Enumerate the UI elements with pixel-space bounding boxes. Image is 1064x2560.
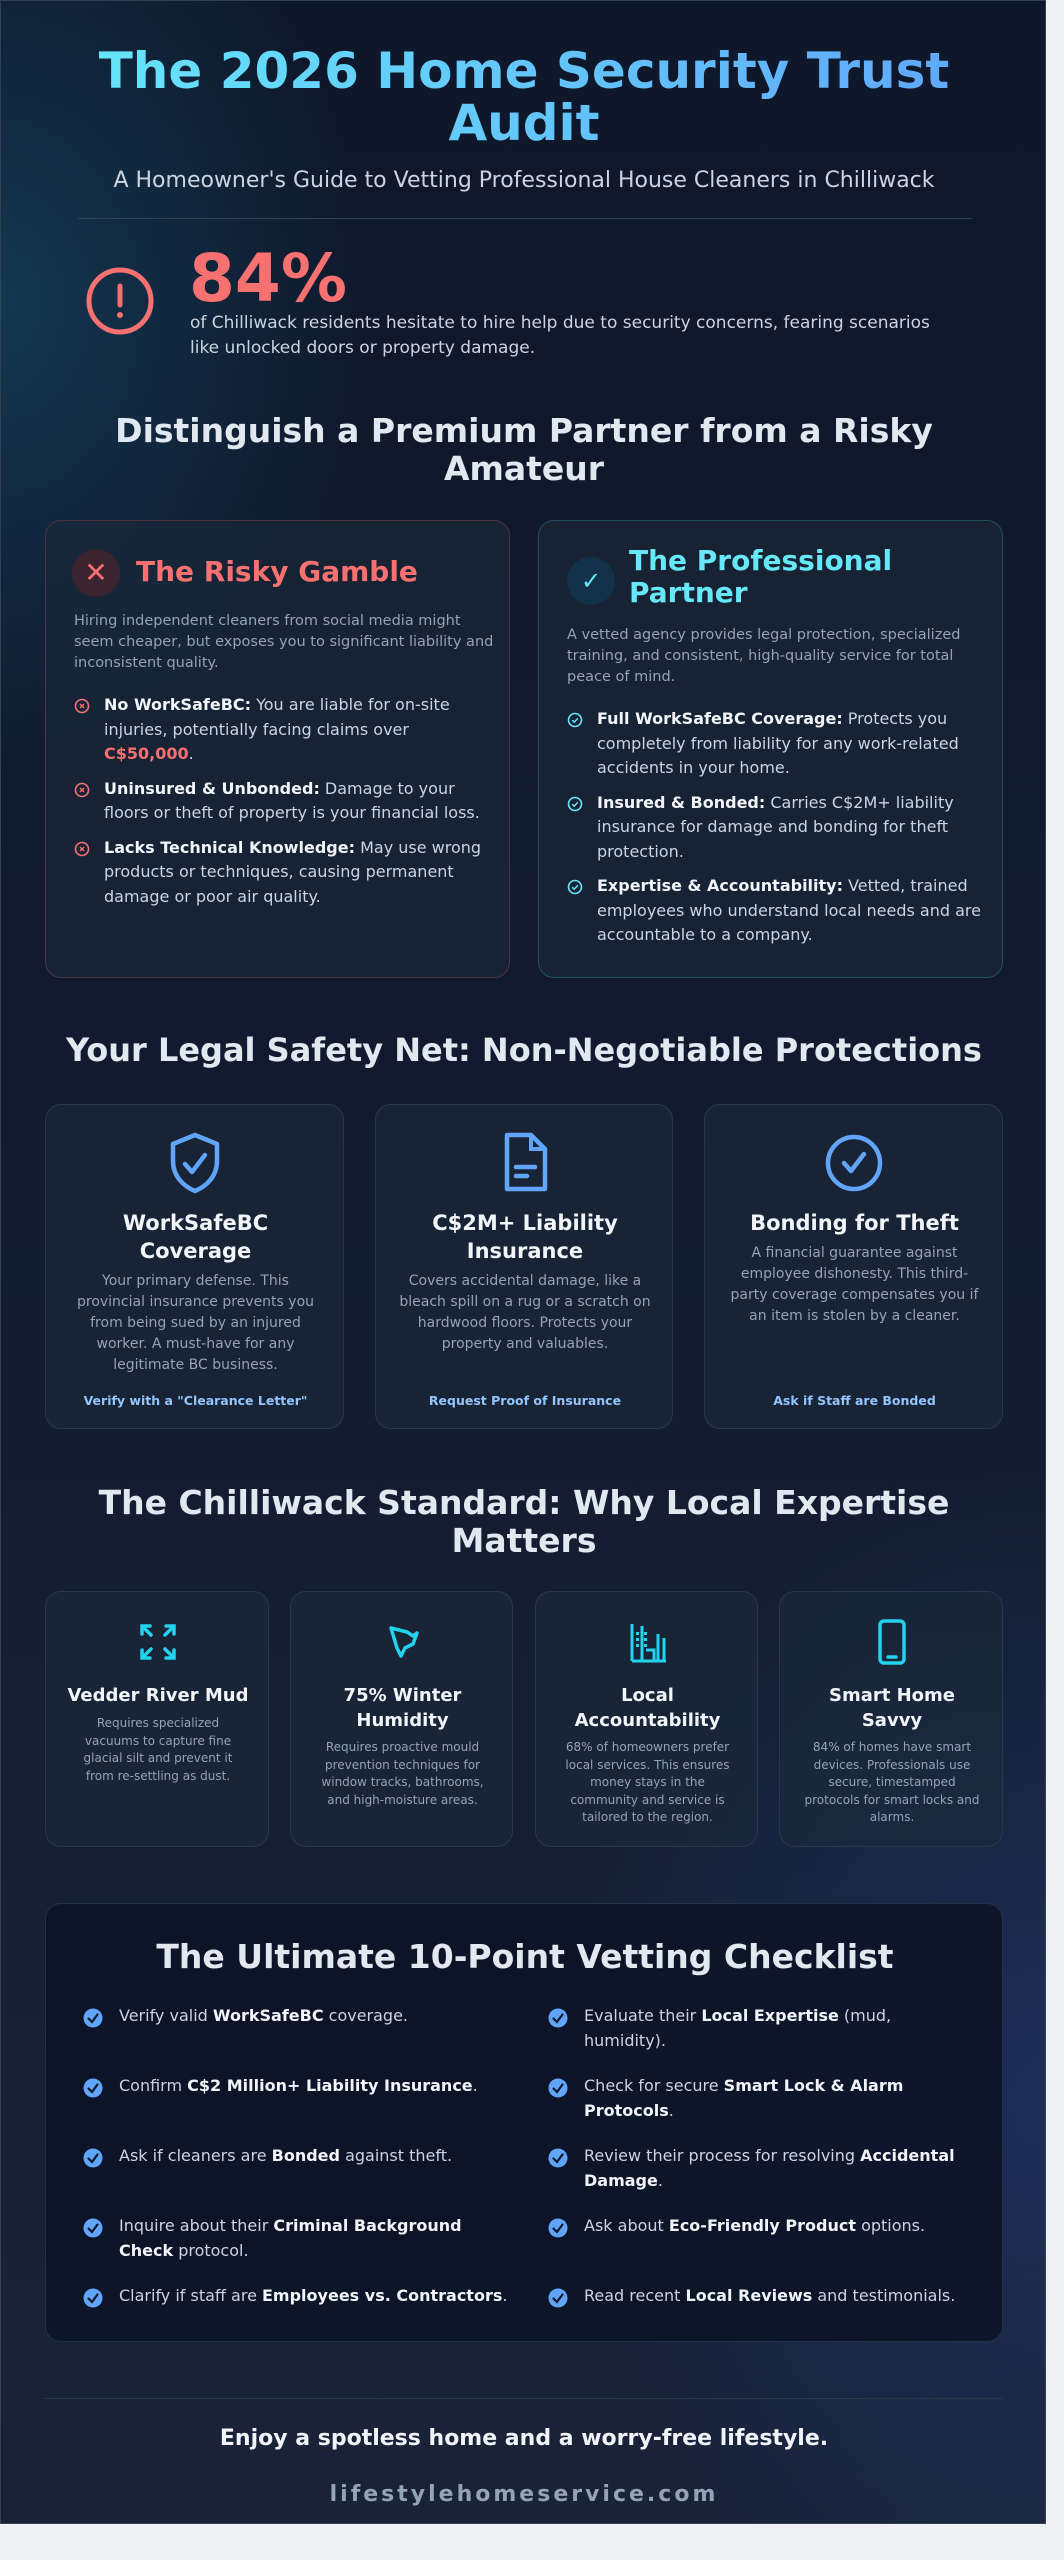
card: workSafeBC	[45, 1104, 344, 1429]
card title: Partner	[629, 576, 748, 609]
footer url: lifestylehomeservice.com	[330, 2482, 718, 2507]
heading: comparison: Distinguish a Premium Partner from a Risky Amateur	[115, 411, 933, 488]
checklist items: Clarify if staff are Employees vs. Contractors.	[119, 2286, 507, 2305]
card: accountability: 68% of homeowners prefer local services. This ensures money stays in the community and service is tailored to the region.	[565, 1740, 730, 1824]
card intro: A vetted agency provides legal protection, specialized training, and consistent, high-quality service for total peace of mind.	[567, 627, 960, 685]
card title: The Professional	[629, 544, 892, 577]
card: humidity: Requires proactive mould prevention techniques for window tracks, bathrooms, and high-moisture areas.	[321, 1740, 484, 1806]
icon: leaf	[389, 1626, 419, 1658]
panel: professional partner	[538, 520, 1003, 978]
card: liability: C$2M+ Liability Insurance	[432, 1211, 618, 1263]
checklist items: Evaluate their Local Expertise (mud, humidity).	[584, 2006, 891, 2050]
panel: checklist	[45, 1903, 1003, 2342]
subtitle: A Homeowner's Guide to Vetting Professional House Cleaners in Chilliwack	[113, 168, 935, 193]
icon: x	[72, 549, 120, 597]
checklist items: Read recent Local Reviews and testimonials.	[584, 2286, 955, 2305]
icon: alert	[86, 268, 154, 334]
card: bonding: Ask if Staff are Bonded	[773, 1393, 936, 1408]
card: smart home: Smart Home Savvy	[829, 1685, 955, 1731]
heading: local expertise: The Chilliwack Standard: Why Local Expertise Matters	[99, 1483, 949, 1560]
card: accountability: Local Accountability	[575, 1685, 720, 1731]
icon: expand arrows	[140, 1624, 176, 1660]
list: risks: No WorkSafeBC: You are liable for on-site injuries, potentially facing claims over C$50,000.	[104, 695, 450, 763]
card: liability: Request Proof of Insurance	[429, 1393, 621, 1408]
list: benefits: Expertise & Accountability: Vetted, trained employees who understand local needs and are accountable to a company.	[597, 876, 981, 944]
card: accountability	[535, 1591, 758, 1847]
icon: check circle	[826, 1134, 882, 1192]
checklist items: Ask about Eco-Friendly Product options.	[584, 2216, 925, 2235]
card: liability: Covers accidental damage, like a bleach spill on a rug or a scratch on hardwood floors. Protects your property and valuables.	[399, 1273, 651, 1352]
checklist items: Review their process for resolving Accidental Damage.	[584, 2146, 955, 2190]
icon: shield	[170, 1132, 220, 1194]
card: smart home: 84% of homes have smart devices. Professionals use secure, timestamped protocols for smart locks and alarms.	[805, 1740, 979, 1824]
card: smart home	[779, 1591, 1003, 1847]
checklist items: Inquire about their Criminal Background Check protocol.	[119, 2216, 462, 2260]
list: risks: Lacks Technical Knowledge: May use wrong products or techniques, causing permanent damage or poor air quality.	[104, 838, 481, 906]
icons: checks	[84, 2008, 568, 2308]
list: benefits: Full WorkSafeBC Coverage: Protects you completely from liability for any work-related accidents in your home.	[597, 709, 959, 777]
icon: check: ✓	[581, 567, 601, 595]
list: benefits: Insured & Bonded: Carries C$2M+ liability insurance for damage and bonding for theft protection.	[597, 792, 954, 860]
card intro: Hiring independent cleaners from social media might seem cheaper, but exposes you to significant liability and inconsistent quality.	[74, 613, 493, 671]
list: risks	[74, 695, 481, 906]
card: vedder river mud: Requires specialized vacuums to capture fine glacial silt and prevent it from re-settling as dust.	[84, 1716, 232, 1782]
checklist title: The Ultimate 10-Point Vetting Checklist	[156, 1937, 894, 1976]
heading: legal safety net: Your Legal Safety Net: Non-Negotiable Protections	[66, 1031, 982, 1069]
card: workSafeBC: WorkSafeBC Coverage	[123, 1211, 268, 1263]
stat number: 84%	[189, 240, 347, 317]
footer tagline: Enjoy a spotless home and a worry-free lifestyle.	[220, 2426, 828, 2451]
card: workSafeBC: Verify with a "Clearance Letter"	[84, 1393, 307, 1408]
checklist items: Check for secure Smart Lock & Alarm Protocols.	[584, 2076, 903, 2120]
checklist items: Confirm C$2 Million+ Liability Insurance.	[119, 2076, 478, 2095]
card: vedder river mud	[45, 1591, 269, 1847]
icon: building	[630, 1624, 666, 1662]
card: humidity	[290, 1591, 513, 1847]
card title: The Risky Gamble	[136, 555, 418, 588]
title: The 2026 Home Security Trust Audit	[99, 42, 949, 152]
card: workSafeBC: Your primary defense. This provincial insurance prevents you from being sued by an injured worker. A must-have for any legitimate BC business.	[77, 1273, 314, 1373]
card: vedder river mud: Vedder River Mud	[67, 1685, 248, 1706]
stat text: of Chilliwack residents hesitate to hire help due to security concerns, fearing scenarios like unlocked doors or property damage.	[190, 313, 930, 358]
list: risks: Uninsured & Unbonded: Damage to your floors or theft of property is your financial loss.	[104, 778, 480, 822]
card: bonding: A financial guarantee against employee dishonesty. This third-party coverage compensates you if an item is stolen by a cleaner.	[731, 1245, 978, 1324]
checklist items	[119, 2006, 955, 2305]
checklist items: Ask if cleaners are Bonded against theft.	[119, 2146, 452, 2165]
card: liability	[375, 1104, 673, 1429]
list: benefits	[568, 709, 981, 944]
icon: document	[504, 1132, 548, 1192]
icon: x: ✕	[84, 556, 108, 589]
checklist items: Verify valid WorkSafeBC coverage.	[119, 2006, 408, 2025]
icon: phone	[878, 1619, 906, 1665]
card: bonding: Bonding for Theft	[750, 1211, 959, 1235]
card: humidity: 75% Winter Humidity	[344, 1685, 461, 1731]
stat callout	[86, 240, 930, 358]
card title	[629, 544, 892, 609]
panel: risky gamble	[45, 520, 510, 978]
card: bonding	[704, 1104, 1003, 1429]
icon: check	[567, 557, 615, 605]
